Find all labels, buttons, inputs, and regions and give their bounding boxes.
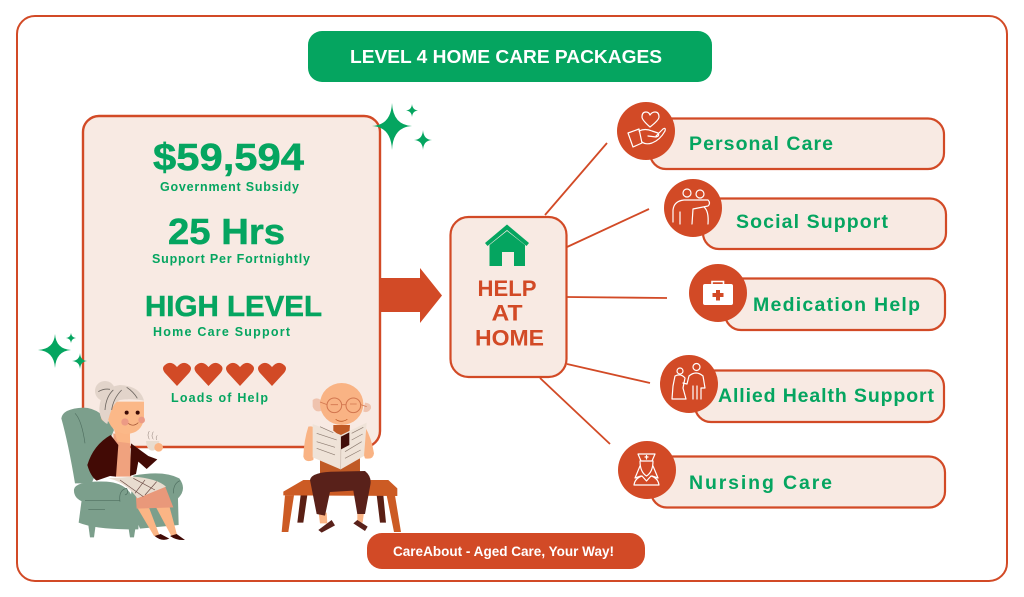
man head bbox=[313, 383, 371, 436]
arrow bbox=[381, 268, 442, 323]
icon: nurse bbox=[634, 454, 659, 485]
help at home label: AT bbox=[492, 300, 523, 326]
item: social support: Social Support bbox=[736, 211, 888, 233]
item: personal care: Personal Care bbox=[689, 133, 833, 155]
title banner: LEVEL 4 HOME CARE PACKAGES bbox=[350, 47, 662, 67]
hearts rating bbox=[163, 363, 286, 386]
hours amount: 25 Hrs bbox=[168, 211, 285, 252]
panel: package summary bbox=[83, 116, 380, 447]
icon: two people bbox=[673, 189, 710, 224]
panel: help at home bbox=[450, 217, 566, 377]
footer banner: CareAbout - Aged Care, Your Way! bbox=[393, 544, 614, 559]
hearts caption: Loads of Help bbox=[171, 391, 268, 405]
woman head bbox=[113, 427, 130, 443]
item: medication help bbox=[689, 264, 945, 330]
man torso bbox=[320, 458, 360, 474]
footer banner bbox=[367, 533, 645, 569]
help at home label: HOME bbox=[475, 326, 544, 350]
item: personal care bbox=[617, 102, 944, 169]
item: allied health support bbox=[660, 355, 944, 422]
sparkles left bbox=[38, 333, 87, 369]
icon: carer and elder bbox=[672, 364, 705, 399]
bench bbox=[283, 480, 397, 496]
illustration: woman in armchair bbox=[61, 381, 185, 540]
subsidy caption: Government Subsidy bbox=[160, 180, 299, 194]
help at home label: HELP bbox=[478, 276, 536, 301]
bench back legs bbox=[297, 495, 386, 523]
help at home label bbox=[475, 276, 544, 350]
subsidy amount: $59,594 bbox=[153, 137, 304, 179]
item: medication help: Medication Help bbox=[753, 294, 920, 316]
illustration: man reading newspaper bbox=[282, 383, 401, 533]
item: nursing care: Nursing Care bbox=[689, 472, 832, 494]
armchair bbox=[61, 408, 183, 537]
item: allied health support: Allied Health Support bbox=[718, 385, 934, 407]
man arms bbox=[303, 426, 374, 461]
icon: first aid kit bbox=[703, 282, 733, 305]
icon: house bbox=[485, 224, 529, 266]
newspaper bbox=[313, 423, 367, 469]
hours caption: Support Per Fortnightly bbox=[152, 252, 310, 266]
title banner bbox=[308, 31, 712, 82]
man legs bbox=[319, 513, 364, 523]
woman torso bbox=[113, 433, 131, 477]
item: nursing care bbox=[618, 441, 945, 508]
connector lines bbox=[540, 143, 667, 444]
level caption: Home Care Support bbox=[153, 325, 291, 339]
item: social support bbox=[664, 179, 946, 249]
woman legs and shoes bbox=[137, 506, 177, 537]
level heading: HIGH LEVEL bbox=[145, 291, 322, 323]
teacup bbox=[146, 441, 159, 451]
sparkles top bbox=[372, 103, 432, 150]
icon: hand holding heart bbox=[628, 112, 665, 147]
